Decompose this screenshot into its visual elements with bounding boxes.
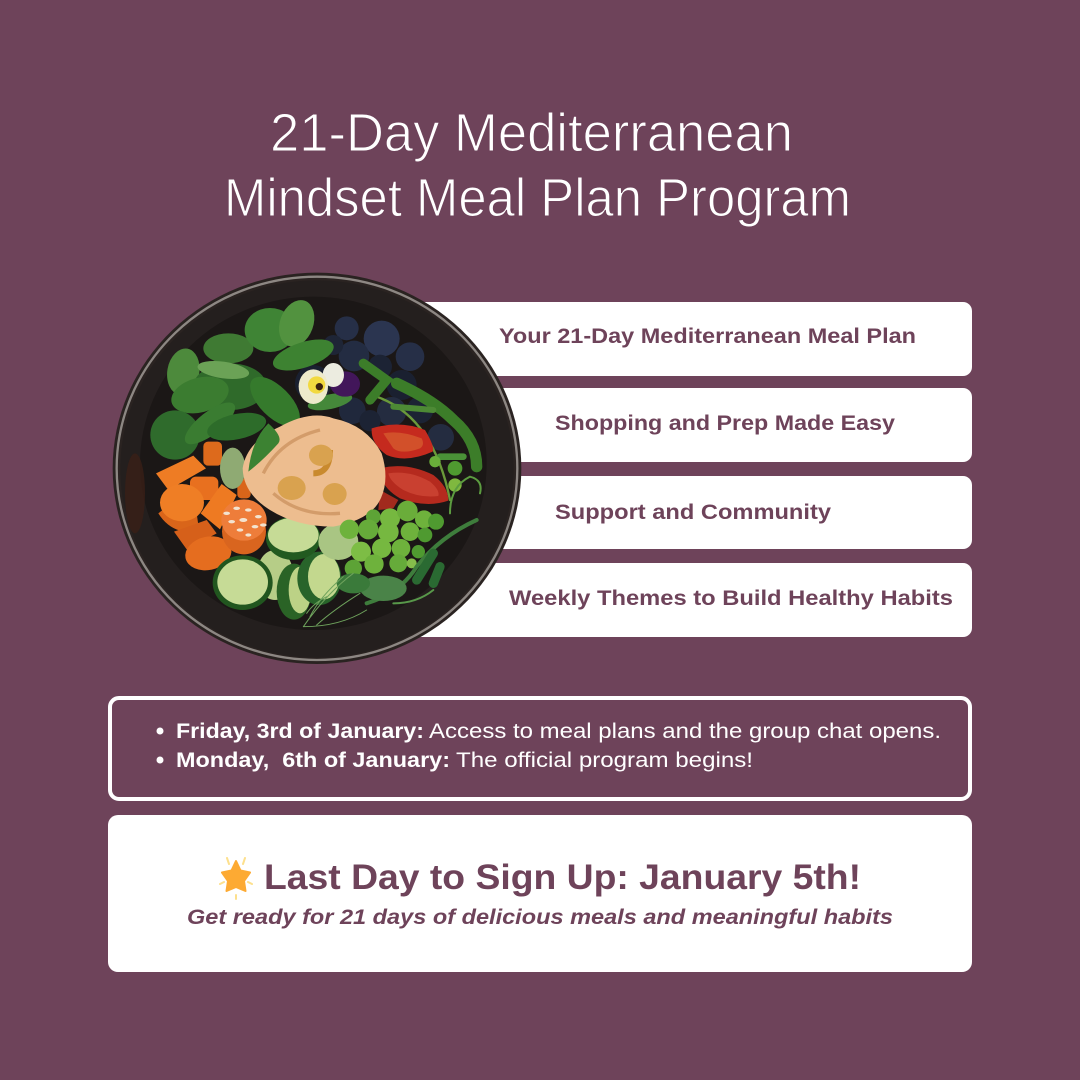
bowl <box>113 273 521 664</box>
edible flower <box>299 363 360 404</box>
feature row: meal plan: Your 21-Day Mediterranean Meal Plan <box>499 325 916 348</box>
feature row: support and community <box>400 476 972 549</box>
date line: friday: Friday, 3rd of January: <box>176 720 424 743</box>
callout subheading: Get ready for 21 days of delicious meals and meaningful habits <box>187 906 893 929</box>
date line: monday: The official program begins! <box>456 749 753 772</box>
pea shoots and herbs <box>303 477 481 627</box>
feature row: meal plan <box>400 302 972 376</box>
date line: monday: Monday, 6th of January: <box>176 749 450 772</box>
peas <box>340 456 462 577</box>
arugula leaf <box>363 363 477 500</box>
title: Mindset Meal Plan Program <box>224 168 851 228</box>
feature row: shopping and prep: Shopping and Prep Made Easy <box>555 412 895 435</box>
carrots <box>156 442 267 574</box>
hummus with chickpeas <box>243 416 385 527</box>
feature row: shopping and prep <box>400 388 972 462</box>
date line: monday <box>156 749 753 772</box>
title: 21-Day Mediterranean <box>270 103 793 163</box>
blueberries <box>295 316 454 451</box>
feature row: weekly themes <box>400 563 972 637</box>
tomatoes <box>372 425 448 510</box>
leafy greens <box>150 295 354 460</box>
illustration: food bowl <box>113 273 521 664</box>
date line: friday: Access to meal plans and the group chat opens. <box>429 720 941 743</box>
callout heading: Last Day to Sign Up: January 5th! <box>264 858 861 897</box>
feature row: support and community: Support and Community <box>555 501 831 524</box>
date line: friday <box>156 720 941 743</box>
panel: sign-up callout <box>108 815 972 972</box>
panel: feature list <box>400 302 972 637</box>
icon: glowing star <box>220 858 252 899</box>
cucumbers <box>213 448 358 620</box>
feature row: weekly themes: Weekly Themes to Build Healthy Habits <box>509 587 953 610</box>
title <box>224 103 851 228</box>
panel: key dates <box>110 698 970 799</box>
